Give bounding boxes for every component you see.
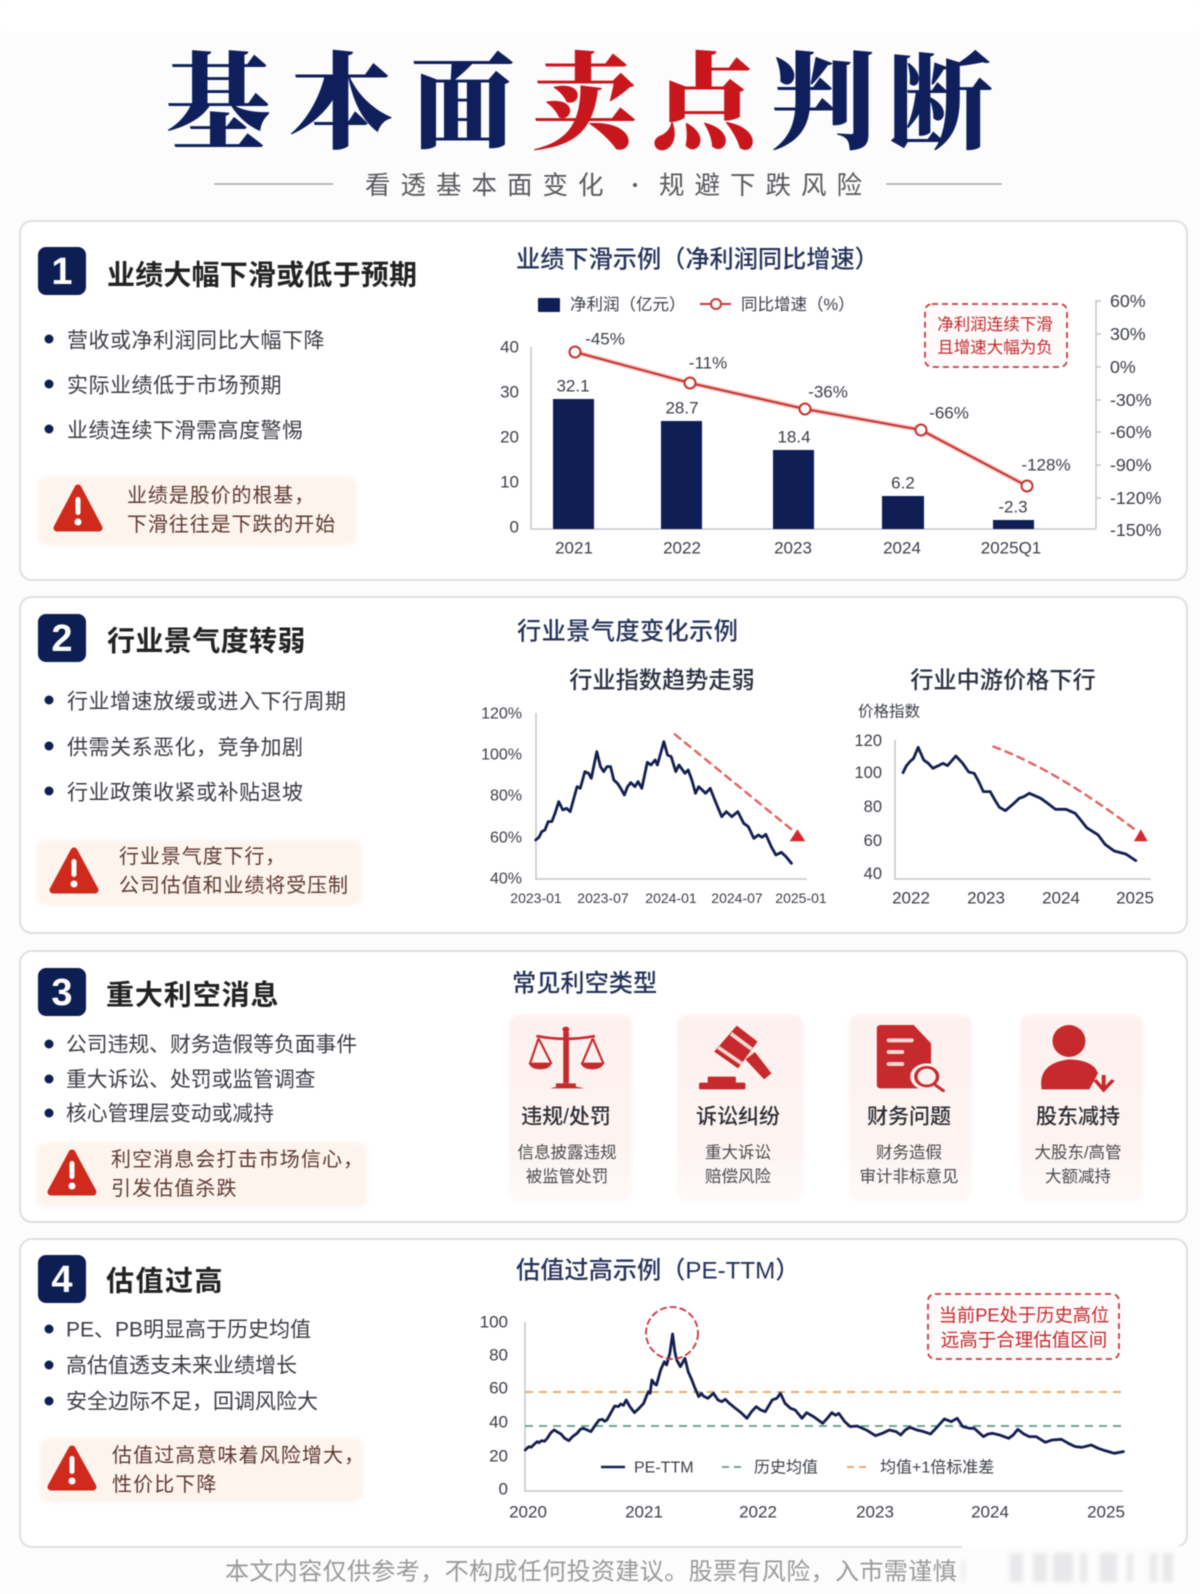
- right chart: mid-stream prices: 100: [854, 764, 882, 782]
- chart title 2: 行业景气度变化示例: [517, 618, 738, 646]
- bar values: 6.2: [891, 474, 915, 492]
- PE-TTM line chart: 2024: [971, 1502, 1009, 1522]
- reference lines: [525, 1392, 1123, 1426]
- left chart: industry index: 2024-07: [711, 890, 763, 906]
- bullets 2: 行业增速放缓或进入下行周期: [67, 690, 346, 714]
- callout 2: 公司估值和业绩将受压制: [119, 874, 349, 897]
- badge 4: 4: [51, 1259, 73, 1301]
- arrow: decline: [675, 734, 805, 841]
- x axis labels: 2022: [663, 538, 701, 558]
- x axis labels: 2025Q1: [981, 538, 1041, 558]
- badge 3: 3: [51, 972, 73, 1014]
- note box 1: 且增速大幅为负: [937, 338, 1053, 357]
- right chart: mid-stream prices: 2023: [967, 888, 1005, 908]
- arrow: decline: [993, 747, 1148, 841]
- watermark: [962, 1546, 1200, 1594]
- icon: gavel: [699, 1026, 771, 1089]
- chart legend 4: [601, 1458, 994, 1476]
- left chart: industry index: 2024-01: [645, 890, 697, 906]
- icon: warning: [53, 851, 95, 890]
- card: shareholder reduction: [1020, 1015, 1143, 1201]
- callout 3: 引发估值杀跌: [111, 1177, 238, 1200]
- chart title 1: 业绩下滑示例（净利润同比增速）: [516, 246, 879, 274]
- x axis labels: 2023: [774, 538, 812, 558]
- icon: warning: [51, 1449, 93, 1487]
- note box 4: [928, 1294, 1119, 1359]
- note box 4: 当前PE处于历史高位: [939, 1304, 1109, 1326]
- bar and line chart: -120%: [1110, 488, 1162, 508]
- card: violation: [509, 1015, 632, 1201]
- bar values: 18.4: [777, 428, 811, 446]
- bullets 2: 行业政策收紧或补贴退坡: [67, 782, 304, 804]
- bar values: -2.3: [998, 498, 1028, 516]
- footer disclaimer: 本文内容仅供参考，不构成任何投资建议。股票有风险，入市需谨慎: [225, 1558, 957, 1586]
- chart legend 1: 同比增速（%）: [741, 295, 855, 314]
- icon: warning: [57, 488, 99, 528]
- chart legend 4: 历史均值: [754, 1458, 818, 1476]
- bar values: 28.7: [665, 398, 699, 418]
- callout 2: 行业景气度下行，: [119, 845, 286, 868]
- PE-TTM line chart: 0: [499, 1480, 508, 1498]
- card: shareholder reduction: 大股东/高管: [1034, 1143, 1122, 1162]
- card: financial: 审计非标意见: [860, 1167, 958, 1186]
- callout 1: 业绩是股价的根基，: [127, 484, 315, 507]
- title: 基: [165, 20, 271, 170]
- right chart: mid-stream prices: [854, 667, 1154, 908]
- note box 4: 远高于合理估值区间: [941, 1330, 1107, 1350]
- bar and line chart: 0: [510, 518, 519, 536]
- subtitle: 看透基本面变化: [365, 172, 614, 200]
- PE-TTM line chart: 2020: [509, 1502, 547, 1522]
- title: 卖: [531, 20, 639, 170]
- subtitle: [214, 172, 1002, 200]
- chart legend 1: [538, 295, 855, 314]
- bullets 2: [44, 690, 346, 804]
- bars: [553, 399, 1034, 529]
- callout 4: 性价比下降: [112, 1473, 218, 1496]
- card: financial: 财务问题: [867, 1106, 951, 1128]
- chart legend 4: PE-TTM: [634, 1460, 694, 1476]
- chart legend 4: 均值+1倍标准差: [880, 1458, 994, 1476]
- PE line: [525, 1334, 1123, 1453]
- note box 1: 净利润连续下滑: [937, 315, 1053, 334]
- heading 4: 估值过高: [106, 1266, 224, 1296]
- PE-TTM line chart: 2021: [625, 1502, 663, 1522]
- subtitle: 规避下跌风险: [659, 172, 872, 200]
- bar and line chart: 60%: [1110, 291, 1146, 311]
- growth labels: -45%: [585, 330, 625, 348]
- bullets 4: 安全边际不足，回调风险大: [66, 1390, 318, 1414]
- heading 2: 行业景气度转弱: [107, 626, 306, 656]
- right chart: mid-stream prices: 120: [854, 732, 882, 750]
- section title 3: 常见利空类型: [512, 970, 657, 998]
- icon: person with down arrow: [1041, 1025, 1113, 1090]
- left chart: industry index: 2025-01: [775, 890, 827, 906]
- card: financial: 财务造假: [876, 1143, 942, 1162]
- growth labels: -36%: [808, 382, 848, 402]
- PE-TTM line chart: 2022: [739, 1502, 777, 1522]
- callout 4: [40, 1438, 365, 1502]
- right chart: mid-stream prices: 2022: [892, 888, 930, 908]
- right chart: mid-stream prices: 80: [864, 798, 882, 816]
- right chart: mid-stream prices: 40: [864, 865, 882, 883]
- note box 1: [925, 304, 1067, 367]
- right chart: mid-stream prices: 60: [864, 832, 882, 850]
- PE-TTM line chart: 20: [489, 1446, 508, 1466]
- PE-TTM line chart: 80: [489, 1346, 508, 1364]
- bar and line chart: -30%: [1110, 390, 1152, 410]
- bar and line chart: 20: [500, 428, 519, 446]
- chart title 4: 估值过高示例（PE-TTM）: [516, 1258, 800, 1284]
- card: litigation: 赔偿风险: [705, 1167, 772, 1186]
- right chart: mid-stream prices: 价格指数: [858, 702, 921, 720]
- growth line: [570, 346, 1032, 492]
- callout 3: 利空消息会打击市场信心，: [111, 1148, 364, 1171]
- card: financial: [849, 1015, 972, 1201]
- left chart: industry index: 60%: [490, 830, 522, 846]
- callout 3: [37, 1143, 367, 1207]
- bar values: 32.1: [556, 376, 590, 396]
- bullets 3: 核心管理层变动或减持: [66, 1102, 274, 1126]
- card: shareholder reduction: 大额减持: [1045, 1167, 1111, 1186]
- bar and line chart: -60%: [1110, 422, 1152, 442]
- card: litigation: [677, 1015, 803, 1201]
- bullets 3: 公司违规、财务造假等负面事件: [66, 1034, 357, 1056]
- bullets 2: 供需关系恶化，竞争加剧: [67, 736, 304, 760]
- right chart: mid-stream prices: 2024: [1042, 888, 1080, 908]
- card: litigation: 重大诉讼: [705, 1143, 771, 1162]
- PE-TTM line chart: 2025: [1087, 1502, 1125, 1522]
- growth labels: -11%: [689, 354, 727, 372]
- chart legend 1: 净利润（亿元）: [570, 295, 686, 314]
- PE-TTM line chart: 2023: [856, 1502, 894, 1522]
- icon: scales: [529, 1027, 604, 1088]
- panel 3: major negative news: [20, 951, 1187, 1222]
- right chart title: 行业中游价格下行: [910, 667, 1096, 693]
- callout 1: 下滑往往是下跌的开始: [127, 513, 336, 536]
- left chart: industry index: 2023-07: [577, 890, 629, 906]
- badge 1: 1: [51, 251, 73, 293]
- heading 1: 业绩大幅下滑或低于预期: [107, 258, 417, 290]
- x axis labels: 2024: [883, 538, 921, 558]
- bar and line chart: [500, 291, 1162, 558]
- bullets 3: [44, 1034, 357, 1126]
- peak circle: [646, 1307, 698, 1359]
- title: [165, 20, 994, 170]
- bar and line chart: -150%: [1110, 520, 1162, 540]
- badge 2: [38, 614, 86, 662]
- PE-TTM line chart: [480, 1307, 1125, 1522]
- bullets 4: [44, 1318, 318, 1414]
- left chart: industry index: 80%: [490, 788, 522, 804]
- bullets 1: 业绩连续下滑需高度警惕: [67, 420, 304, 442]
- growth labels: [585, 330, 1071, 474]
- icon: document with magnifier: [877, 1025, 943, 1091]
- badge 3: [38, 968, 86, 1016]
- growth labels: -66%: [929, 404, 969, 422]
- left chart: industry index: 2023-01: [510, 890, 562, 906]
- card: violation: 信息披露违规: [518, 1143, 616, 1162]
- left chart: industry index: 40%: [490, 870, 522, 888]
- PE-TTM line chart: 100: [480, 1312, 508, 1332]
- badge 4: [38, 1255, 86, 1303]
- panel 2: industry weakening: [20, 597, 1187, 933]
- title: 本: [288, 20, 394, 170]
- x axis labels: [555, 538, 1041, 558]
- bullets 1: 营收或净利润同比大幅下降: [67, 330, 325, 352]
- callout 4: 估值过高意味着风险增大，: [112, 1444, 365, 1467]
- left chart: industry index: 100%: [481, 746, 522, 764]
- x axis labels: 2021: [555, 538, 593, 558]
- badge 1: [38, 247, 86, 295]
- index line: [536, 742, 791, 863]
- title: 判: [770, 20, 876, 170]
- title: 断: [888, 20, 994, 170]
- bullets 1: [44, 330, 325, 442]
- bar and line chart: 40: [500, 338, 519, 356]
- bar and line chart: -90%: [1110, 455, 1152, 475]
- right chart: mid-stream prices: 2025: [1116, 888, 1154, 908]
- left chart title: 行业指数趋势走弱: [569, 667, 755, 693]
- bar values: [556, 376, 1028, 516]
- callout 1: [38, 477, 357, 545]
- heading 3: 重大利空消息: [106, 980, 279, 1010]
- left chart: industry index: [481, 667, 827, 906]
- panel 1: earnings decline: [20, 221, 1187, 580]
- panel 4: overvaluation: [20, 1239, 1187, 1547]
- card: litigation: 诉讼纠纷: [696, 1106, 780, 1128]
- bar and line chart: 30: [500, 382, 519, 402]
- callout 2: [37, 840, 362, 905]
- title: 面: [410, 20, 516, 170]
- left chart: industry index: 120%: [481, 706, 522, 722]
- bullets 4: PE、PB明显高于历史均值: [66, 1318, 311, 1342]
- PE-TTM line chart: 40: [489, 1412, 508, 1432]
- bar and line chart: 10: [500, 472, 519, 492]
- card: violation: 违规/处罚: [521, 1106, 611, 1128]
- card: violation: 被监管处罚: [526, 1167, 608, 1186]
- price line: [903, 747, 1136, 861]
- icon: warning: [51, 1153, 93, 1192]
- title: 点: [651, 20, 765, 170]
- bar and line chart: 30%: [1110, 324, 1146, 344]
- PE-TTM line chart: 60: [489, 1378, 508, 1398]
- card: shareholder reduction: 股东减持: [1036, 1106, 1120, 1128]
- bullets 3: 重大诉讼、处罚或监管调查: [66, 1068, 316, 1092]
- bar and line chart: 0%: [1110, 357, 1136, 377]
- growth labels: -128%: [1021, 456, 1071, 474]
- bullets 1: 实际业绩低于市场预期: [67, 374, 282, 398]
- bullets 4: 高估值透支未来业绩增长: [66, 1354, 297, 1378]
- badge 2: 2: [51, 618, 73, 660]
